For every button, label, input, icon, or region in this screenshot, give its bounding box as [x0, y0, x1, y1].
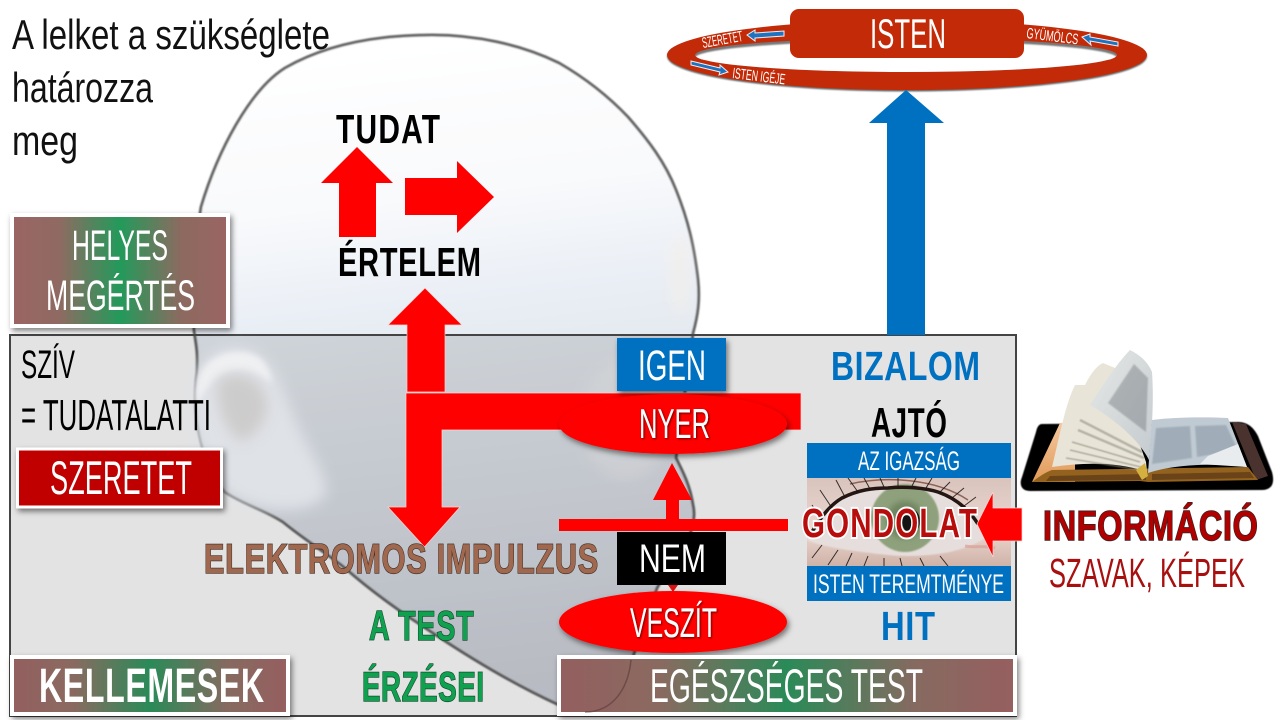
label: hit: HIT — [881, 602, 935, 649]
fore edge right — [1232, 422, 1268, 480]
box: kellemesek: KELLEMESEK — [39, 659, 265, 713]
heading: tudat: TUDAT — [336, 106, 440, 152]
box: Isten: ISTEN — [870, 10, 946, 57]
ribbon — [1136, 463, 1148, 480]
head silhouette — [194, 35, 699, 712]
label: információ: INFORMÁCIÓ — [1043, 502, 1258, 549]
label: elektromos impulzus: ELEKTROMOS IMPULZUS — [204, 535, 598, 582]
arrow: up to értelem — [388, 288, 462, 392]
arrow: from information — [977, 492, 1022, 557]
oval: veszít: VESZÍT — [630, 599, 717, 646]
label: ajtó: AJTÓ — [871, 399, 947, 446]
label: gyümölcs: GYÜMÖLCS — [1026, 24, 1079, 48]
box: Isten — [790, 9, 1024, 58]
page block — [1032, 467, 1258, 482]
arrow: gyümölcs — [1082, 34, 1118, 46]
box: egészséges test — [559, 657, 1015, 714]
book cover — [1021, 422, 1273, 491]
image: eye — [807, 478, 1011, 566]
heading: értelem: ÉRTELEM — [338, 239, 481, 285]
label: szív: SZÍV — [21, 342, 75, 387]
label: a test érzései: A TEST — [369, 601, 474, 649]
arrow: szeretet — [747, 30, 784, 41]
right page — [1148, 417, 1247, 473]
ring: God cycle — [667, 20, 1147, 92]
oval: nyer: NYER — [639, 400, 710, 447]
label: szeretet: SZERETET — [701, 28, 744, 52]
box: helyes megértés: MEGÉRTÉS — [46, 272, 195, 320]
label: gondolat: GONDOLAT — [802, 500, 977, 546]
label: bizalom: BIZALOM — [831, 343, 980, 389]
box: igen — [617, 338, 726, 391]
arrow: Isten igéje — [691, 61, 728, 75]
arrow: branch down to impulse — [388, 393, 801, 547]
label: a test érzései — [362, 601, 484, 710]
box: helyes megértés — [12, 215, 228, 326]
icon: ear — [192, 347, 326, 510]
curled back pages — [1052, 363, 1147, 472]
box: nem: NEM — [639, 537, 706, 581]
fore edge left — [1032, 423, 1075, 482]
oval: veszít — [559, 591, 787, 653]
arrow: right from tudat — [405, 161, 494, 233]
arrow: small up — [653, 463, 692, 520]
title: meg — [12, 117, 78, 164]
icon: open book — [1021, 350, 1273, 491]
title: határozza — [12, 64, 153, 111]
label: tudatalatti: = TUDATALATTI — [21, 391, 211, 440]
bar: isten teremtménye: ISTEN TEREMTMÉNYE — [813, 569, 1004, 599]
bar: az igazság — [807, 443, 1011, 478]
arrow: blue upward — [869, 90, 944, 335]
title — [12, 11, 330, 164]
flying page — [1090, 350, 1153, 460]
bar: isten teremtménye — [807, 566, 1011, 601]
label: a test érzései: ÉRZÉSEI — [362, 663, 484, 710]
box: szeretet: SZERETET — [50, 451, 192, 504]
panel: heart / subconscious — [10, 335, 1016, 716]
bar: az igazság: AZ IGAZSÁG — [858, 446, 960, 476]
arrow tip below nem — [668, 585, 678, 592]
arrow: up to tudat — [321, 147, 393, 237]
box: szeretet — [18, 449, 222, 507]
box: igen: IGEN — [638, 342, 706, 390]
box: egészséges test: EGÉSZSÉGES TEST — [650, 659, 923, 712]
box: nem — [617, 532, 726, 585]
box: helyes megértés: HELYES — [72, 222, 168, 270]
bar: threshold — [559, 519, 788, 531]
oval: nyer — [559, 394, 787, 454]
title: A lelket a szükséglete — [12, 11, 330, 58]
label: Isten igéje: ISTEN IGÉJE — [732, 65, 786, 88]
